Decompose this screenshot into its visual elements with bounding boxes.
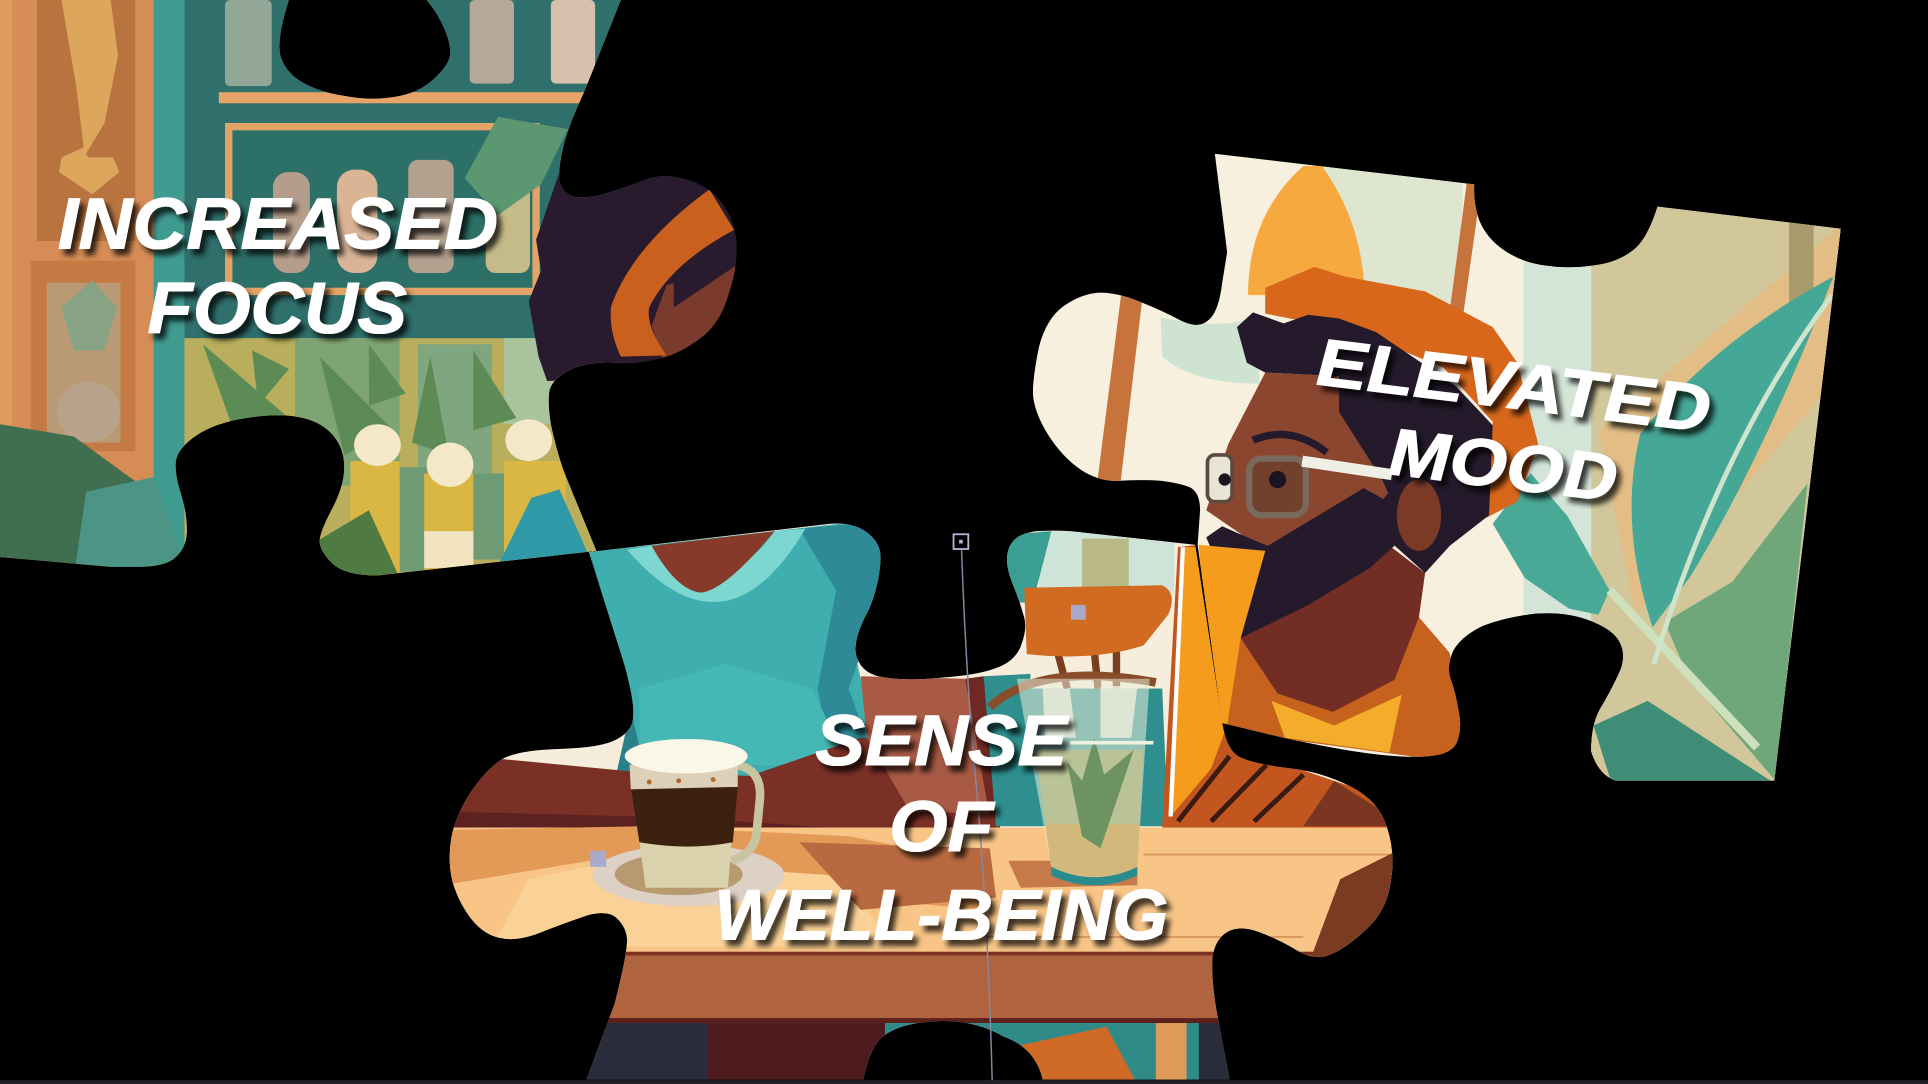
window and leaves xyxy=(1006,531,1174,602)
wall and pillars xyxy=(0,0,639,590)
vertical guide xyxy=(962,550,992,1084)
label: sense of well-being: SENSE xyxy=(815,701,1070,781)
label: elevated mood: ELEVATED xyxy=(1308,326,1720,446)
arms xyxy=(450,676,1000,842)
label: elevated mood xyxy=(1308,326,1720,516)
man's jacket, neck and collar xyxy=(1199,541,1462,762)
face xyxy=(1206,373,1388,556)
label: increased focus: FOCUS xyxy=(148,268,407,349)
backdrop xyxy=(443,516,1414,1084)
label: sense of well-being: WELL-BEING xyxy=(714,875,1168,955)
label: increased focus xyxy=(58,183,498,349)
table top xyxy=(443,826,1414,1023)
label: sense of well-being: OF xyxy=(889,787,996,867)
woman torso xyxy=(589,524,881,776)
guide handles xyxy=(590,534,1086,1084)
water glass with plant xyxy=(1017,679,1153,885)
hat xyxy=(1265,267,1538,518)
hair xyxy=(1237,312,1493,573)
coffee glass on saucer xyxy=(593,739,784,906)
woman's hair and headband xyxy=(528,172,737,382)
chair and back teal xyxy=(984,585,1172,826)
eyebrow xyxy=(1253,434,1327,452)
handle top xyxy=(954,534,968,549)
ear xyxy=(1396,478,1442,552)
label: increased focus: INCREASED xyxy=(58,183,498,264)
teal leaves xyxy=(1493,277,1833,781)
wall and windows xyxy=(1021,148,1857,787)
beard xyxy=(1206,488,1394,638)
bottom edge strip xyxy=(0,1080,1928,1084)
plants and lower windows xyxy=(0,338,602,584)
legs under table xyxy=(578,1023,1236,1084)
shelves with bottles xyxy=(219,0,595,291)
label: elevated mood: MOOD xyxy=(1381,416,1627,516)
glasses xyxy=(1207,455,1392,515)
label: sense of well-being xyxy=(714,701,1168,955)
panel: puzzle piece elevated mood xyxy=(1021,148,1857,787)
handle chair xyxy=(1071,605,1086,620)
lamp xyxy=(1248,166,1365,295)
man's body xyxy=(1162,545,1402,830)
handle saucer xyxy=(590,851,606,867)
panel: puzzle piece increased focus xyxy=(0,0,750,590)
panel: puzzle piece sense of well-being xyxy=(443,516,1414,1084)
background color bands xyxy=(1097,160,1844,787)
